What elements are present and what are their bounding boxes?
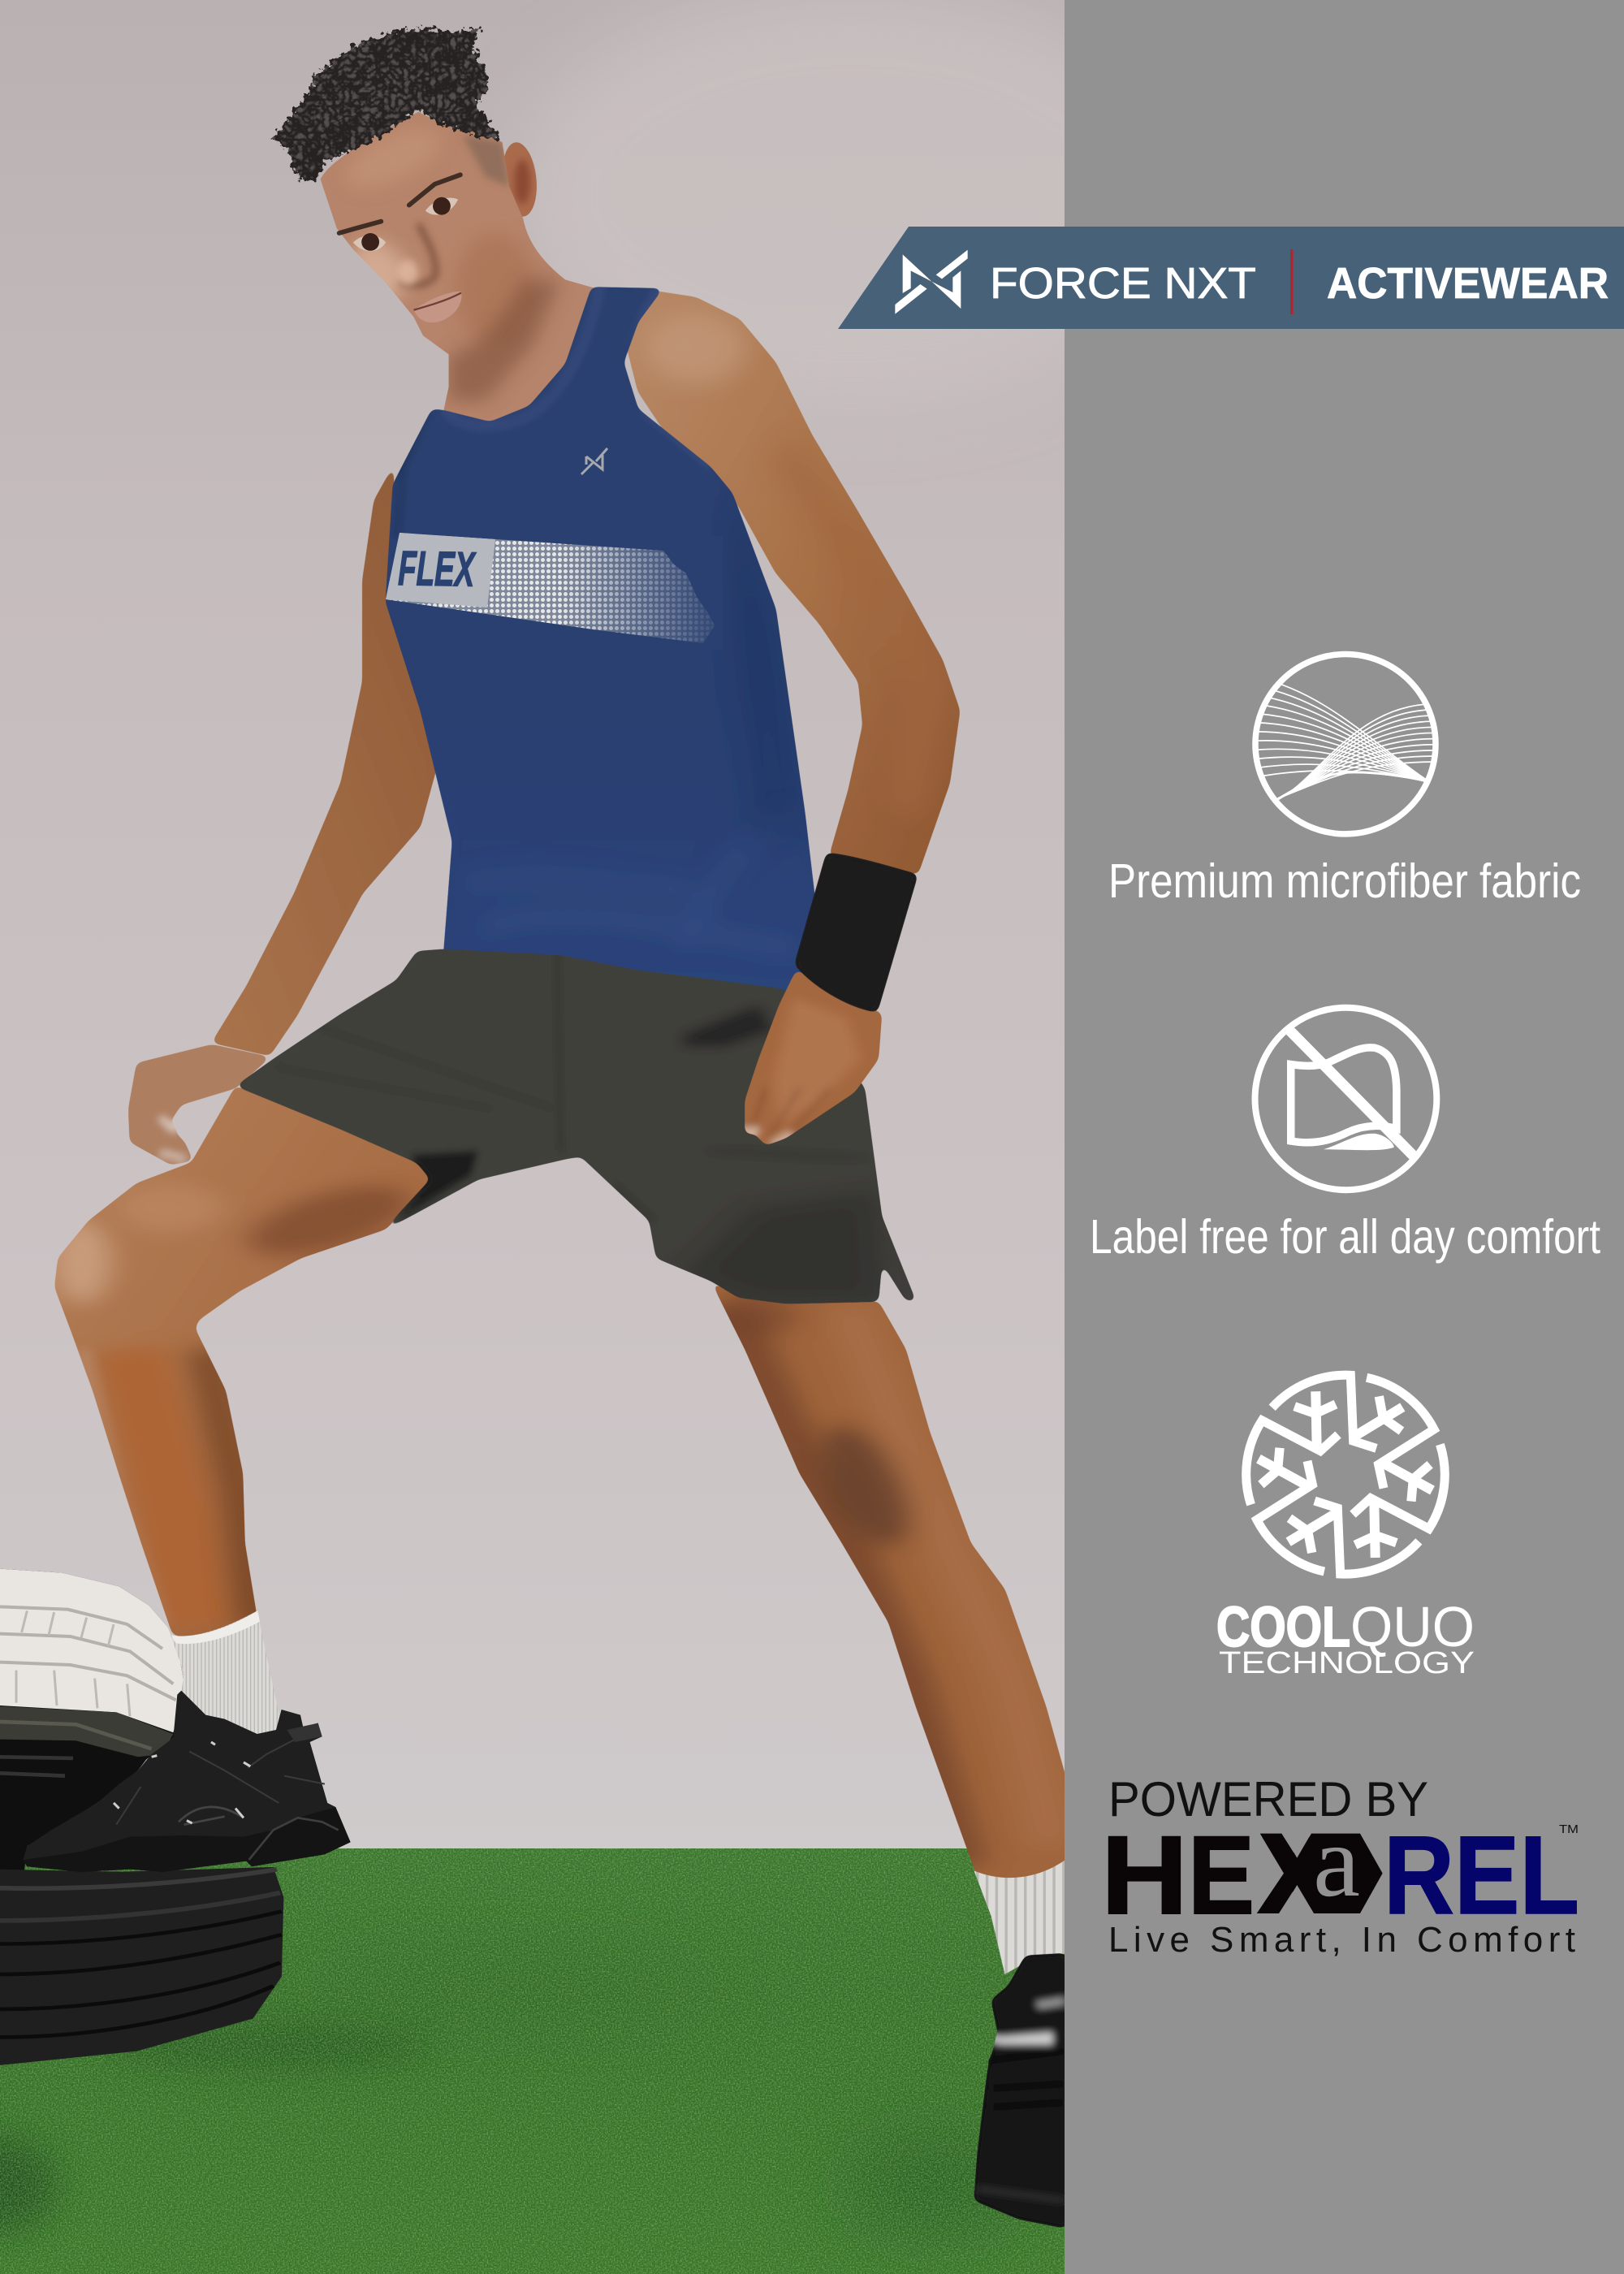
left sock xyxy=(171,1610,279,1736)
panel: photo of athlete xyxy=(0,0,1065,2274)
right shoe xyxy=(974,1953,1066,2229)
right sock xyxy=(974,1859,1066,1974)
coolquo wordmark: COOLQUO xyxy=(1216,1595,1475,1658)
FLEX wordmark: FLEX xyxy=(398,541,477,597)
ear xyxy=(499,141,540,218)
left shoe xyxy=(23,1691,351,1872)
icon: label free xyxy=(1255,1008,1436,1190)
hexarel logo: TM xyxy=(1559,1822,1579,1836)
right arm xyxy=(624,290,960,875)
brand name: FORCE NXT xyxy=(990,259,1256,308)
face shading xyxy=(338,118,560,401)
white tyre xyxy=(0,1569,184,1870)
eyes xyxy=(353,236,386,251)
hexarel logo: E xyxy=(1188,1814,1255,1938)
skin of face and neck xyxy=(321,112,598,434)
left leg: thigh and shin xyxy=(54,1086,430,1639)
divider xyxy=(1290,249,1293,314)
hexarel logo: H xyxy=(1101,1814,1188,1938)
nose xyxy=(400,224,436,285)
right hand xyxy=(745,970,882,1145)
navy tank top xyxy=(386,287,819,1015)
grass floor xyxy=(0,1848,1065,2274)
shoe sole xyxy=(23,1807,351,1872)
panel: grey features column xyxy=(1065,0,1624,2274)
hexarel logo xyxy=(1101,1805,1579,1938)
icon: microfiber fabric xyxy=(1255,655,1436,834)
hexarel logo: a xyxy=(1313,1805,1360,1918)
left arm xyxy=(212,464,443,1056)
wall backdrop xyxy=(0,0,1065,1860)
powered by heading: POWERED BY xyxy=(1108,1772,1428,1827)
brows xyxy=(339,175,460,233)
hexarel logo: X xyxy=(1257,1814,1319,1938)
hair xyxy=(267,24,500,187)
category: ACTIVEWEAR xyxy=(1327,259,1609,308)
chest logo xyxy=(581,448,607,474)
technology line: TECHNOLOGY xyxy=(1219,1646,1475,1680)
head and neck xyxy=(321,112,598,434)
shorts xyxy=(235,949,916,1303)
black tyre xyxy=(0,1867,283,2065)
chest print band xyxy=(386,533,723,650)
wristband xyxy=(795,853,918,1012)
hexarel logo: REL xyxy=(1384,1814,1579,1938)
lips xyxy=(414,292,462,322)
icon: coolquo snowflake xyxy=(1223,1361,1468,1588)
banner xyxy=(838,227,1624,329)
tagline: Live Smart, In Comfort xyxy=(1108,1920,1575,1960)
logo: force nxt mark xyxy=(895,250,968,314)
left hand xyxy=(128,1044,270,1165)
right leg xyxy=(704,1281,1073,1896)
